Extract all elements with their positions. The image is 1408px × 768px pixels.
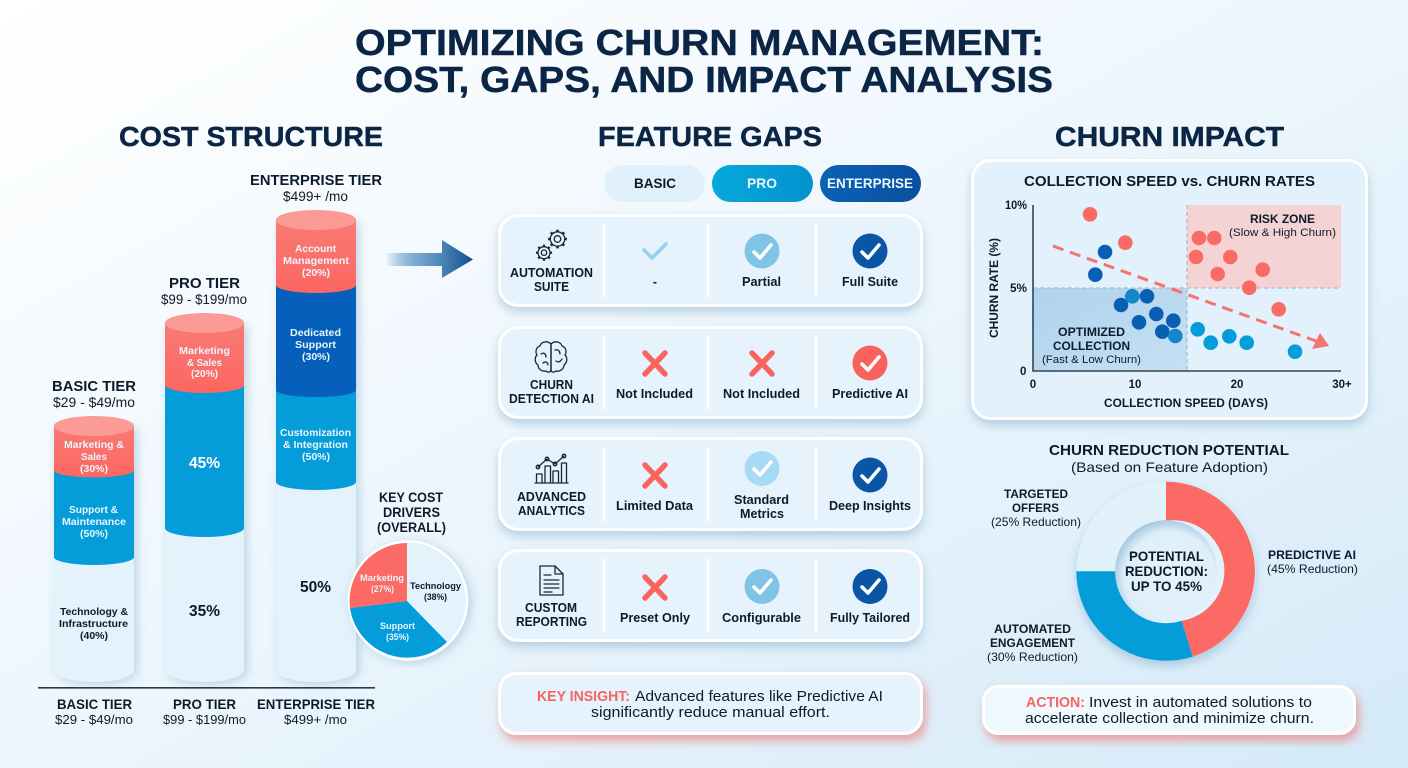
bar: enterprise tier stack: Management [283,255,350,267]
label: basic tier top: BASIC TIER [52,378,136,395]
axis tick labels: 20 [1231,379,1243,391]
donut centre text: REDUCTION: [1125,563,1208,579]
label: automated engagement: AUTOMATED [994,622,1071,636]
heading: key cost drivers: KEY COST [379,490,444,505]
label: automated engagement: (30% Reduction) [987,650,1078,664]
axis label: enterprise tier [257,696,375,727]
cell: pro not included: Not Included [723,387,800,401]
tier pill: pro: PRO [747,175,777,191]
panel: churn reduction potential [984,442,1358,734]
donut centre text: UP TO 45% [1131,578,1203,594]
row: advanced analytics [500,438,922,530]
label: pro tier top: PRO TIER [169,275,240,292]
icon: document [540,566,563,595]
axis label: pro tier: $99 - $199/mo [163,712,246,727]
bar: enterprise tier stack: Support [295,339,337,351]
cell: pro partial [742,234,781,289]
callout: action: accelerate collection and minimize churn. [1025,710,1314,727]
label: optimized collection: (Fast & Low Churn) [1042,354,1141,366]
cell: pro not included [723,353,800,401]
bar: enterprise tier stack [276,210,356,682]
panel: feature gaps [500,165,922,734]
bar: basic tier stack: Sales [81,451,107,463]
pie chart: key cost drivers: Technology [410,581,462,592]
label: optimized collection [1042,325,1141,366]
bar: enterprise tier stack: (50%) [302,451,330,463]
label: optimized collection: OPTIMIZED [1058,325,1125,339]
cell: basic not included [616,353,693,401]
heading: churn reduction potential: (Based on Feature Adoption) [1071,459,1268,475]
label: pro tier top: $99 - $199/mo [161,292,247,307]
label: pro tier top [161,275,247,307]
axis label: basic tier: $29 - $49/mo [55,712,133,727]
panel: cost structure [38,172,467,727]
heading: churn impact: CHURN IMPACT [1055,121,1284,152]
label: enterprise tier top [250,172,382,204]
label: churn detection ai: CHURN [530,378,573,392]
axis label: basic tier [55,696,133,727]
callout: action: Invest in automated solutions to [1089,694,1312,711]
tier pill: basic [604,165,705,202]
label: automated engagement [987,622,1078,664]
label: predictive ai [1267,548,1358,576]
bar: basic tier stack: Support & [69,504,118,516]
heading: churn reduction potential [1049,442,1289,475]
axis tick labels: 30+ [1332,379,1352,391]
callout: key insight: Advanced features like Predictive AI [635,688,883,705]
cell: enterprise deep insights [829,458,911,513]
label: custom reporting: CUSTOM [525,601,577,615]
bar: basic tier stack: Infrastructure [59,618,128,630]
label: custom reporting [516,601,587,629]
bar: enterprise tier stack: 50% [300,579,331,596]
bar: pro tier stack [165,313,244,682]
axis label: basic tier: BASIC TIER [57,696,132,712]
cell: basic limited data: Limited Data [616,499,694,513]
callout: key insight: KEY INSIGHT: [537,688,630,705]
y axis title: CHURN RATE (%) [987,238,1001,338]
pie chart: key cost drivers: Support [380,621,416,632]
label: automation suite [510,266,593,294]
chart title: COLLECTION SPEED vs. CHURN RATES [1024,174,1315,190]
heading: cost structure: COST STRUCTURE [119,121,383,152]
pie chart: key cost drivers [349,542,467,660]
scatter points: pro [1190,322,1302,359]
heading: key cost drivers: DRIVERS [383,505,440,520]
axis tick labels: 0 [1020,366,1026,378]
bar: enterprise tier stack: (30%) [302,351,330,363]
label: targeted offers: (25% Reduction) [991,515,1081,529]
scatter points: high churn [1083,207,1286,317]
axis baseline [38,687,375,689]
heading: churn reduction potential: CHURN REDUCTION POTENTIAL [1049,442,1289,459]
cell: pro standard metrics: Metrics [740,507,784,521]
bar: basic tier stack: Technology & [60,606,128,618]
donut centre text [1125,548,1208,594]
title: COST, GAPS, AND IMPACT ANALYSIS [355,59,1053,100]
bar: enterprise tier stack: Dedicated [290,327,341,339]
cell: enterprise fully tailored [830,569,910,625]
axis label: enterprise tier: $499+ /mo [284,712,347,727]
bar: pro tier stack: (20%) [191,368,218,380]
heading: key cost drivers [377,490,446,535]
arrow: trend line [1053,246,1329,349]
label: targeted offers [991,487,1081,529]
icon: analytics chart [535,454,568,483]
heading: feature gaps: FEATURE GAPS [598,121,822,152]
icon: brain [535,342,567,372]
label: advanced analytics: ANALYTICS [518,504,585,518]
x axis title: COLLECTION SPEED (DAYS) [1104,396,1268,410]
bar: basic tier stack: Maintenance [62,516,126,528]
heading: key cost drivers: (OVERALL) [377,520,446,535]
label: custom reporting: REPORTING [516,615,587,629]
row: churn detection ai [500,328,922,418]
bar: pro tier stack: & Sales [187,357,222,369]
pie chart: key cost drivers: (35%) [386,632,409,643]
panel: churn impact scatter chart [972,160,1366,418]
callout: action: ACTION: [1026,694,1085,711]
label: churn detection ai: DETECTION AI [509,392,594,406]
bar: basic tier stack [54,416,134,682]
cell: basic preset only: Preset Only [620,611,690,625]
axis label: pro tier: PRO TIER [173,696,236,712]
label: predictive ai: (45% Reduction) [1267,562,1358,576]
cell: enterprise deep insights: Deep Insights [829,499,911,513]
bar: pro tier stack: Marketing [179,345,230,357]
scatter points: mid blue [1125,289,1183,343]
zone: optimized [1033,288,1187,371]
axis tick labels: 0 [1030,379,1036,391]
cell: enterprise full suite: Full Suite [842,275,898,289]
cell: pro standard metrics: Standard [734,493,789,507]
label: predictive ai: PREDICTIVE AI [1268,548,1356,562]
pie chart: key cost drivers: (38%) [424,592,447,603]
bar: basic tier stack: (40%) [80,630,108,642]
label: targeted offers: OFFERS [1012,501,1059,515]
label: automation suite: SUITE [534,280,569,294]
callout: key insight [500,674,922,734]
axis tick labels: 10% [1005,200,1027,212]
label: automated engagement: ENGAGEMENT [990,636,1076,650]
label: basic tier top [52,378,136,410]
cell: pro standard metrics [734,451,789,521]
label: enterprise tier top: $499+ /mo [283,189,348,204]
tier pill: pro [712,165,813,202]
label: enterprise tier top: ENTERPRISE TIER [250,172,382,189]
donut chart [1076,482,1256,661]
icon: gears [537,231,566,260]
cell: pro partial: Partial [742,275,781,289]
title [355,22,1053,100]
arrow: cost to features [385,240,473,278]
cell: pro configurable: Configurable [722,611,801,625]
bar: enterprise tier stack: Customization [280,427,351,439]
label: churn detection ai [509,378,594,406]
bar: pro tier stack: 45% [189,455,220,472]
callout: action [984,686,1354,734]
cell: basic limited data [616,465,694,513]
label: advanced analytics: ADVANCED [517,490,586,504]
cell: enterprise predictive ai [832,346,908,401]
bar: enterprise tier stack: Account [295,243,336,255]
donut centre text: POTENTIAL [1129,548,1204,564]
label: risk zone: RISK ZONE [1250,214,1315,226]
cell: enterprise predictive ai: Predictive AI [832,387,908,401]
bar: enterprise tier stack: & Integration [283,439,348,451]
cell: basic preset only [620,577,690,625]
row: automation suite [500,216,922,306]
cell: enterprise full suite [842,234,898,289]
axis tick labels: 10 [1129,379,1141,391]
cell: basic none: - [653,275,657,289]
axis label: pro tier [163,696,246,727]
bar: basic tier stack: (30%) [80,463,108,475]
axis label: enterprise tier: ENTERPRISE TIER [257,696,375,712]
label: basic tier top: $29 - $49/mo [53,395,135,410]
label: automation suite: AUTOMATION [510,266,593,280]
label: risk zone [1229,214,1336,239]
cell: enterprise fully tailored: Fully Tailored [830,611,910,625]
tier pill: enterprise: ENTERPRISE [827,175,913,191]
bar: enterprise tier stack: (20%) [302,267,330,279]
axis tick labels: 5% [1010,283,1027,295]
callout: key insight: significantly reduce manual effort. [591,704,830,721]
cell: basic not included: Not Included [616,387,693,401]
bar: pro tier stack: 35% [189,603,220,620]
label: advanced analytics [517,490,586,518]
tier pill: enterprise [820,165,921,202]
title: OPTIMIZING CHURN MANAGEMENT: [355,22,1044,63]
label: optimized collection: COLLECTION [1053,339,1130,353]
label: risk zone: (Slow & High Churn) [1229,227,1336,239]
zone: risk [1187,205,1341,288]
cell: pro configurable [722,569,801,625]
pie chart: key cost drivers: Marketing [360,573,404,584]
tier pill: basic: BASIC [634,175,676,191]
label: targeted offers: TARGETED [1004,487,1068,501]
bar: basic tier stack: Marketing & [64,439,124,451]
scatter points: enterprise [1088,245,1181,339]
pie chart: key cost drivers: (27%) [371,584,394,595]
cell: basic none [644,244,666,289]
bar: basic tier stack: (50%) [80,528,108,540]
row: custom reporting [500,550,922,640]
axis tick labels [1005,200,1352,391]
